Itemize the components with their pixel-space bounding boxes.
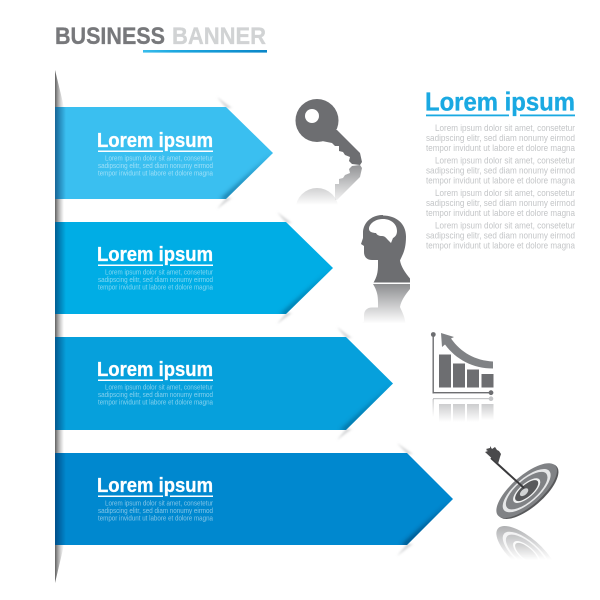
arrow 2 body text: Lorem ipsum dolor sit amet, consetetur <box>105 270 214 276</box>
target reflection <box>496 526 550 558</box>
right text block: sadipscing elitr, sed diam nonumy eirmod <box>426 166 575 176</box>
arrow 1 body text: sadipscing elitr, sed diam nonumy eirmod <box>98 163 213 170</box>
panel: arrow 4 <box>55 443 453 556</box>
left fold shadow <box>55 70 64 583</box>
key reflection <box>296 165 362 231</box>
icon: target with arrow <box>485 446 558 558</box>
arrow 3 body text: sadipscing elitr, sed diam nonumy eirmod <box>98 392 213 399</box>
arrow 2 body text: tempor invidunt ut labore et dolore magna <box>98 284 213 292</box>
title: Business Banner <box>55 23 267 53</box>
panel: arrow 2 <box>55 212 333 324</box>
panel: arrow 1 <box>55 97 273 209</box>
arrow 3 heading: Lorem ipsum <box>97 359 213 381</box>
arrow 1 body text: Lorem ipsum dolor sit amet, consetetur <box>105 156 214 162</box>
icon: head with brain <box>361 215 410 352</box>
title: Business Banner: BANNER <box>172 23 266 50</box>
right text block: tempor invidunt ut labore et dolore magna <box>426 208 576 219</box>
arrow 1 body text: tempor invidunt ut labore et dolore magna <box>98 170 213 178</box>
right text block: sadipscing elitr, sed diam nonumy eirmod <box>426 133 575 144</box>
arrow 4 heading: Lorem ipsum <box>97 475 213 497</box>
right heading: Lorem ipsum <box>425 86 575 116</box>
arrow 4 body text: sadipscing elitr, sed diam nonumy eirmod <box>98 508 213 515</box>
arrow 4 body text: Lorem ipsum dolor sit amet, consetetur <box>105 500 214 508</box>
icon: rising bar chart <box>431 332 494 422</box>
right text block: Lorem ipsum dolor sit amet, consetetur <box>435 123 576 134</box>
right text block: sadipscing elitr, sed diam nonumy eirmod <box>426 230 575 242</box>
arrow 3 body text: tempor invidunt ut labore et dolore magna <box>98 400 213 406</box>
right text block <box>426 123 576 252</box>
arrow 4 body text: tempor invidunt ut labore et dolore magna <box>98 516 213 522</box>
chart reflection <box>432 396 494 422</box>
right text block: sadipscing elitr, sed diam nonumy eirmod <box>426 198 575 209</box>
arrow 2 heading: Lorem ipsum <box>97 244 213 266</box>
arrow 1 body text <box>98 156 214 178</box>
right text block: tempor invidunt ut labore et dolore magna <box>426 176 576 186</box>
arrow 2 body text: sadipscing elitr, sed diam nonumy eirmod <box>98 277 213 284</box>
arrow 1 heading: Lorem ipsum <box>97 130 213 152</box>
arrow 3 body text: Lorem ipsum dolor sit amet, consetetur <box>105 384 214 392</box>
arrow 3 body text <box>98 384 214 406</box>
arrow 4 body text <box>98 500 214 522</box>
right text block: Lorem ipsum dolor sit amet, consetetur <box>435 156 576 166</box>
title: Business Banner: BUSINESS <box>55 23 165 50</box>
right text block: tempor invidunt ut labore et dolore magna <box>426 143 576 154</box>
icon: key <box>296 99 362 231</box>
panel: arrow 3 <box>55 327 393 440</box>
head reflection <box>361 284 410 352</box>
right text block: Lorem ipsum dolor sit amet, consetetur <box>435 220 576 232</box>
right text block: Lorem ipsum dolor sit amet, consetetur <box>435 188 576 199</box>
arrow 2 body text <box>98 270 214 292</box>
right text block: tempor invidunt ut labore et dolore magna <box>426 240 576 252</box>
